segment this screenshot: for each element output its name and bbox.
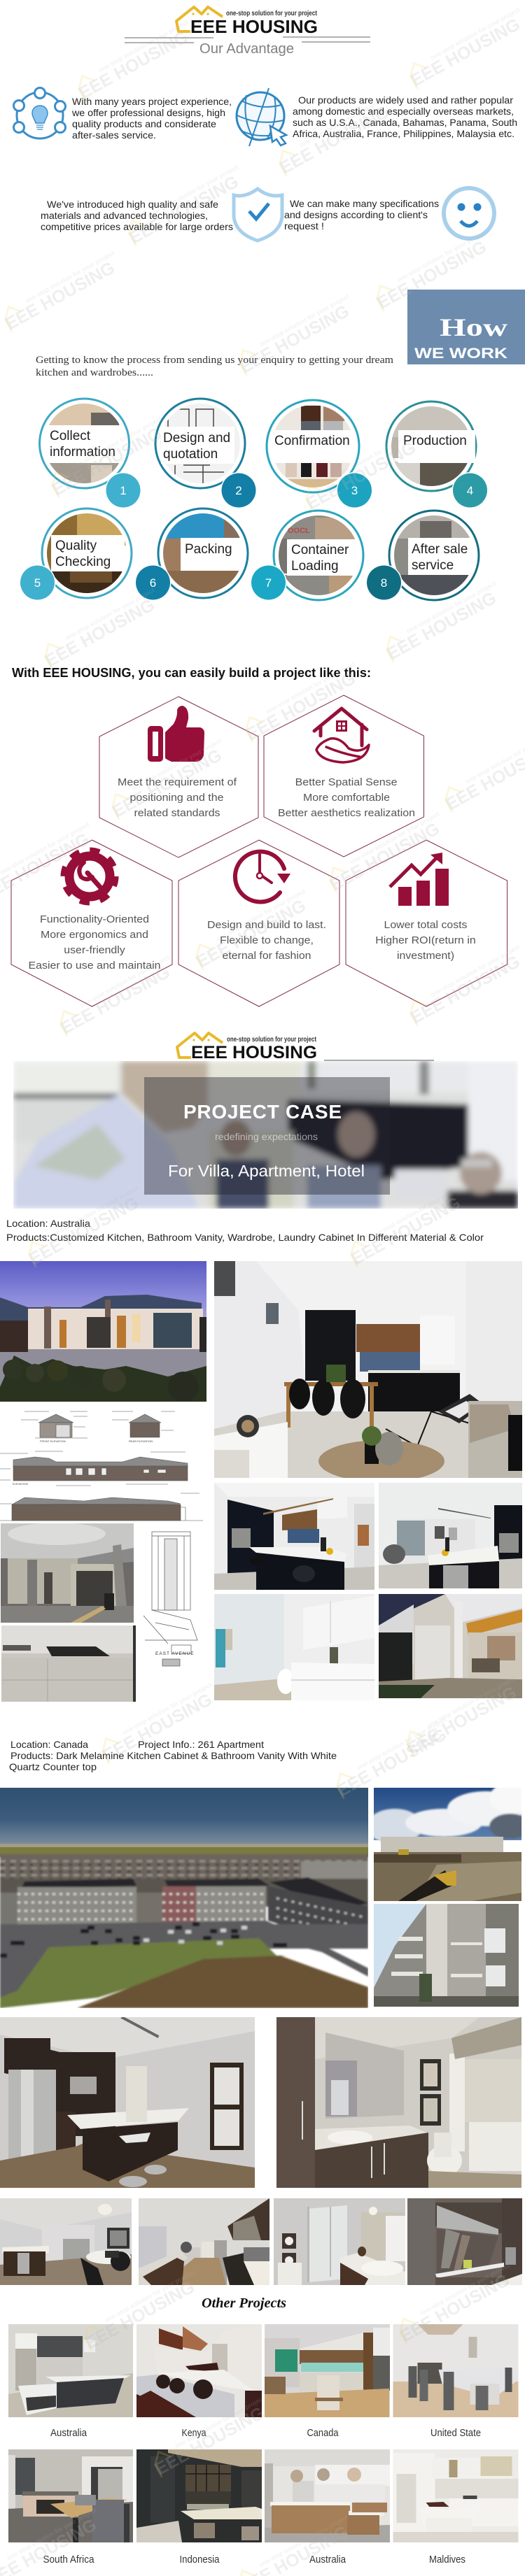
intro text: kitchen and wardrobes......	[36, 367, 153, 378]
second logo: EEE HOUSING	[191, 1043, 317, 1062]
project photo: south africa	[8, 2449, 133, 2542]
text: EEE HOUSING	[42, 595, 158, 671]
hexagon: built to last: Flexible to change,	[220, 934, 314, 946]
heading: build a project: With EEE HOUSING, you can easily build a project like this:	[12, 666, 371, 680]
text: materials: competitive prices available for large orders	[41, 221, 233, 232]
text: materials: materials and advanced technologies,	[41, 210, 208, 221]
hexagon: requirement: related standards	[134, 807, 220, 819]
hexagon: requirement: positioning and the	[130, 792, 224, 804]
hexagon: lower costs: Higher ROI(return in	[375, 934, 476, 946]
text: EEE HOUSING	[327, 819, 443, 895]
step 8: after sale service	[365, 511, 479, 601]
text: one-stop solution for your project	[6, 2507, 97, 2561]
text: specifications	[284, 198, 439, 232]
icon: smiley	[444, 188, 494, 239]
step 1: collect information: information	[50, 445, 115, 460]
photo: construction site	[374, 1788, 522, 1901]
project photo: united state	[393, 2324, 518, 2417]
caption row 2	[43, 2554, 465, 2566]
text: EEE HOUSING	[152, 2403, 268, 2479]
heading: our advantage: Our Advantage	[200, 41, 294, 57]
step 8: after sale service: After sale	[412, 542, 468, 557]
text: specifications: and designs according to client's	[284, 209, 428, 220]
hexagon: functionality: Functionality-Oriented	[40, 913, 149, 925]
hexagon: built to last	[178, 840, 340, 1006]
project photo: australia	[8, 2324, 133, 2417]
hexagon: built to last: Design and build to last.	[207, 919, 326, 931]
text: elevation labels	[13, 1439, 153, 1486]
hexagon: requirement	[99, 697, 258, 858]
text: one-stop solution for your project	[370, 1185, 461, 1239]
photo: house exterior at dusk	[0, 1261, 206, 1402]
text: EEE HOUSING	[374, 237, 490, 313]
photo: bathroom vanity	[276, 2017, 522, 2188]
text: elevation labels: FRONT ELEVATION	[40, 1439, 66, 1443]
text: one-stop solution for your project	[24, 250, 115, 304]
caption row 2: Australia	[309, 2554, 346, 2566]
project info: canada: Products: Dark Melamine Kitchen Cabinet & Bathroom Vanity With White	[10, 1750, 337, 1761]
project photo: indonesia	[136, 2449, 262, 2542]
project info: australia	[6, 1218, 484, 1243]
caption row 1	[50, 2427, 481, 2439]
hexagon: spatial sense: Better aesthetics realization	[278, 807, 415, 819]
photo: shower bathroom	[274, 2198, 405, 2285]
text: one-stop solution for your project	[48, 1185, 139, 1239]
text: EEE HOUSING	[99, 1690, 216, 1765]
hexagon: functionality	[11, 840, 172, 1006]
caption row 1: Kenya	[182, 2427, 206, 2439]
step 3: confirmation: Confirmation	[274, 434, 350, 448]
step 4: production: Production	[403, 434, 467, 448]
icon: light bulb network	[14, 88, 66, 138]
text: one-stop solution for your project	[174, 2395, 265, 2449]
hexagon: functionality: user-friendly	[64, 944, 125, 956]
step 3: confirmation: 3	[351, 484, 358, 497]
caption row 1: Canada	[307, 2427, 339, 2439]
text: one-stop solution for your project	[0, 821, 90, 876]
caption row 1: Australia	[50, 2427, 88, 2439]
step 5: quality checking: Quality	[55, 539, 97, 553]
photo: open dining room	[0, 2198, 132, 2285]
project info: canada: Location: Canada	[10, 1739, 88, 1750]
text: EEE HOUSING	[2, 258, 118, 334]
project photo: kenya	[136, 2324, 262, 2417]
text: EEE HOUSING	[109, 746, 225, 821]
step 7: container loading: Container	[291, 543, 349, 557]
project photo: canada	[265, 2324, 390, 2417]
text: one-stop solution for your project	[97, 19, 189, 73]
step 7: container loading	[251, 511, 368, 601]
second logo: one-stop solution for your project	[227, 1036, 317, 1044]
text: one-stop solution for your project	[131, 737, 223, 792]
text: specifications: We can make many specifications	[290, 198, 439, 209]
text: one-stop solution for your project	[121, 1681, 213, 1736]
intro text	[36, 355, 393, 378]
banner: project case: redefining expectations	[215, 1131, 318, 1142]
text: specifications: request !	[284, 220, 324, 232]
photo: dark wood kitchen	[407, 2198, 522, 2285]
caption row 2: South Africa	[43, 2554, 94, 2566]
text: one-stop solution for your project	[265, 660, 356, 715]
text: EEE HOUSING	[384, 588, 500, 664]
photo: aerial apartments	[0, 1788, 368, 2008]
text: EEE HOUSING	[26, 1193, 142, 1269]
hexagon: lower costs: investment)	[397, 950, 454, 962]
project info: australia: Location: Australia	[6, 1218, 90, 1229]
step 8: after sale service: 8	[381, 576, 387, 590]
text: one-stop solution for your project	[429, 944, 521, 998]
banner: project case: For Villa, Apartment, Hotel	[168, 1162, 365, 1180]
step 2: design and quotation: quotation	[163, 447, 218, 462]
photo: kitchen with bar stools	[0, 2017, 255, 2188]
photo: kitchen island	[214, 1483, 374, 1590]
text: one-stop solution for your project	[325, 429, 416, 484]
text: one-stop solution for your project	[396, 229, 487, 283]
step 2: design and quotation: 2	[235, 484, 242, 497]
step 4: production	[386, 401, 489, 508]
text: one-stop solution for your project	[356, 1716, 447, 1771]
step 7: container loading: 7	[265, 576, 272, 590]
hexagon: spatial sense: Better Spatial Sense	[295, 776, 398, 788]
second logo	[177, 1033, 434, 1062]
hexagon: functionality: Easier to use and maintain	[28, 960, 161, 972]
text: project experience: after-sales service.	[72, 129, 156, 141]
text: EEE HOUSING	[243, 669, 359, 744]
project info: canada: Project Info.: 261 Apartment	[138, 1739, 264, 1750]
text: markets: such as U.S.A., Canada, Bahamas, Panama, South	[293, 117, 517, 128]
text: EEE HOUSING	[397, 2270, 513, 2346]
panel: how we work: WE WORK	[414, 346, 507, 362]
text: elevation labels: REAR ELEVATION	[129, 1439, 153, 1443]
text: EEE HOUSING	[276, 102, 393, 178]
hexagon: lower costs: Lower total costs	[384, 919, 468, 931]
step 1: collect information: Collect	[50, 429, 91, 443]
text: EEE HOUSING	[82, 2277, 198, 2353]
photo: galley kitchen	[139, 2198, 270, 2285]
text: EEE HOUSING	[404, 1683, 520, 1758]
text: one-stop solution for your project	[419, 2262, 510, 2317]
panel: how we work	[407, 290, 525, 364]
text: EEE HOUSING	[57, 962, 174, 1038]
heading: our advantage	[125, 37, 370, 57]
step 1: collect information: 1	[120, 484, 127, 497]
text: one-stop solution for your project	[429, 6, 521, 61]
heading: other projects: Other Projects	[202, 2296, 286, 2311]
top logo: EEE HOUSING	[190, 16, 318, 37]
text: one-stop solution for your project	[215, 888, 307, 942]
text: one-stop solution for your project	[71, 415, 162, 470]
step 2: design and quotation: Design and	[163, 431, 230, 446]
step 5: quality checking: 5	[34, 576, 41, 590]
photo: house under construction	[1, 1523, 134, 1623]
hexagon: lower costs	[346, 840, 507, 1006]
drawings: elevations	[0, 1411, 203, 1521]
photo: living and kitchen	[379, 1483, 522, 1588]
text: one-stop solution for your project	[258, 293, 350, 348]
top logo: one-stop solution for your project	[226, 10, 318, 17]
text: materials	[41, 199, 233, 232]
text: elevation labels: ELEVATION	[13, 1482, 28, 1486]
text: one-stop solution for your project	[405, 580, 497, 634]
text: one-stop solution for your project	[104, 2269, 195, 2324]
text: east avenue: EAST AVENUE	[155, 1651, 195, 1656]
project info: australia: Products:Customized Kitchen, Bathroom Vanity, Wardrobe, Laundry Cabinet In Different Material & Color	[6, 1232, 484, 1243]
project info: canada	[9, 1739, 337, 1772]
text: EEE HOUSING	[334, 1725, 450, 1800]
step 4: production: 4	[467, 484, 473, 497]
text: project experience	[71, 96, 232, 141]
banner: project case	[13, 1061, 518, 1209]
hexagon: spatial sense: More comfortable	[303, 792, 390, 804]
intro text: Getting to know the process from sending us your enquiry to getting your dream	[36, 355, 393, 366]
step 1: collect information	[39, 399, 141, 508]
step 7: container loading: Loading	[291, 559, 339, 574]
text: one-stop solution for your project	[298, 94, 390, 148]
text: EEE HOUSING	[407, 952, 524, 1027]
step 8: after sale service: service	[412, 558, 454, 573]
text: project experience: quality products and considerate	[72, 118, 216, 129]
text: EEE HOUSING	[193, 896, 309, 972]
text: EEE HOUSING	[49, 424, 165, 499]
text: markets: Our products are widely used and rather popular	[298, 94, 513, 106]
text: EEE HOUSING	[348, 1193, 464, 1269]
hexagon: functionality: More ergonomics and	[41, 929, 148, 941]
top logo	[176, 7, 318, 37]
photo: cooktop counter	[1, 1625, 136, 1702]
banner: project case: PROJECT CASE	[183, 1101, 342, 1123]
step 6: packing	[134, 508, 248, 601]
step 2: design and quotation	[155, 399, 257, 508]
text: EEE HOUSING	[237, 301, 353, 377]
icon: globe with cursor	[237, 88, 286, 146]
text: EEE HOUSING	[126, 172, 242, 248]
text: EEE HOUSING	[303, 438, 419, 513]
text: markets	[293, 94, 517, 139]
project photo: australia two	[265, 2449, 390, 2542]
hexagon: spatial sense	[264, 695, 424, 857]
text: EEE HOUSING	[407, 15, 524, 90]
text: markets: among domestic and especially overseas markets,	[293, 106, 514, 117]
hexagon: requirement: Meet the requirement of	[118, 776, 237, 788]
text: one-stop solution for your project	[148, 164, 239, 218]
project photo: maldives	[393, 2449, 518, 2542]
photo: patio at dusk	[379, 1594, 522, 1698]
project info: canada: Quartz Counter top	[9, 1761, 97, 1772]
text: materials: We've introduced high quality and safe	[47, 199, 218, 210]
photo: bathroom	[214, 1594, 374, 1700]
step 3: confirmation	[267, 400, 372, 508]
text: one-stop solution for your project	[258, 2514, 349, 2568]
hexagon: built to last: eternal for fashion	[223, 950, 311, 962]
drawing: floor plan	[144, 1532, 197, 1666]
caption row 2: Indonesia	[179, 2554, 220, 2566]
step 6: packing: Packing	[185, 542, 232, 557]
step 6: packing: 6	[150, 576, 156, 590]
text: markets: Africa, Australia, France, Philippines, Malaysia etc.	[293, 128, 514, 139]
caption row 1: United State	[430, 2427, 481, 2439]
caption row 2: Maldives	[429, 2554, 465, 2566]
text: EEE HOUSING	[76, 27, 192, 103]
panel: how we work: How	[440, 313, 507, 341]
text: project experience: we offer professional designs, high	[71, 107, 225, 118]
step 7: container loading: OOCL	[288, 527, 310, 535]
text: one-stop solution for your project	[79, 954, 171, 1009]
step 5: quality checking: Checking	[55, 555, 111, 569]
text: one-stop solution for your project	[64, 587, 155, 641]
icon: shield check	[234, 189, 282, 241]
photo: open plan interior	[214, 1261, 522, 1478]
text: one-stop solution for your project	[349, 811, 440, 865]
text: one-stop solution for your project	[426, 1674, 517, 1729]
step 5: quality checking	[20, 508, 133, 601]
photo: apartment balconies	[374, 1904, 519, 2007]
text: project experience: With many years project experience,	[72, 96, 232, 107]
